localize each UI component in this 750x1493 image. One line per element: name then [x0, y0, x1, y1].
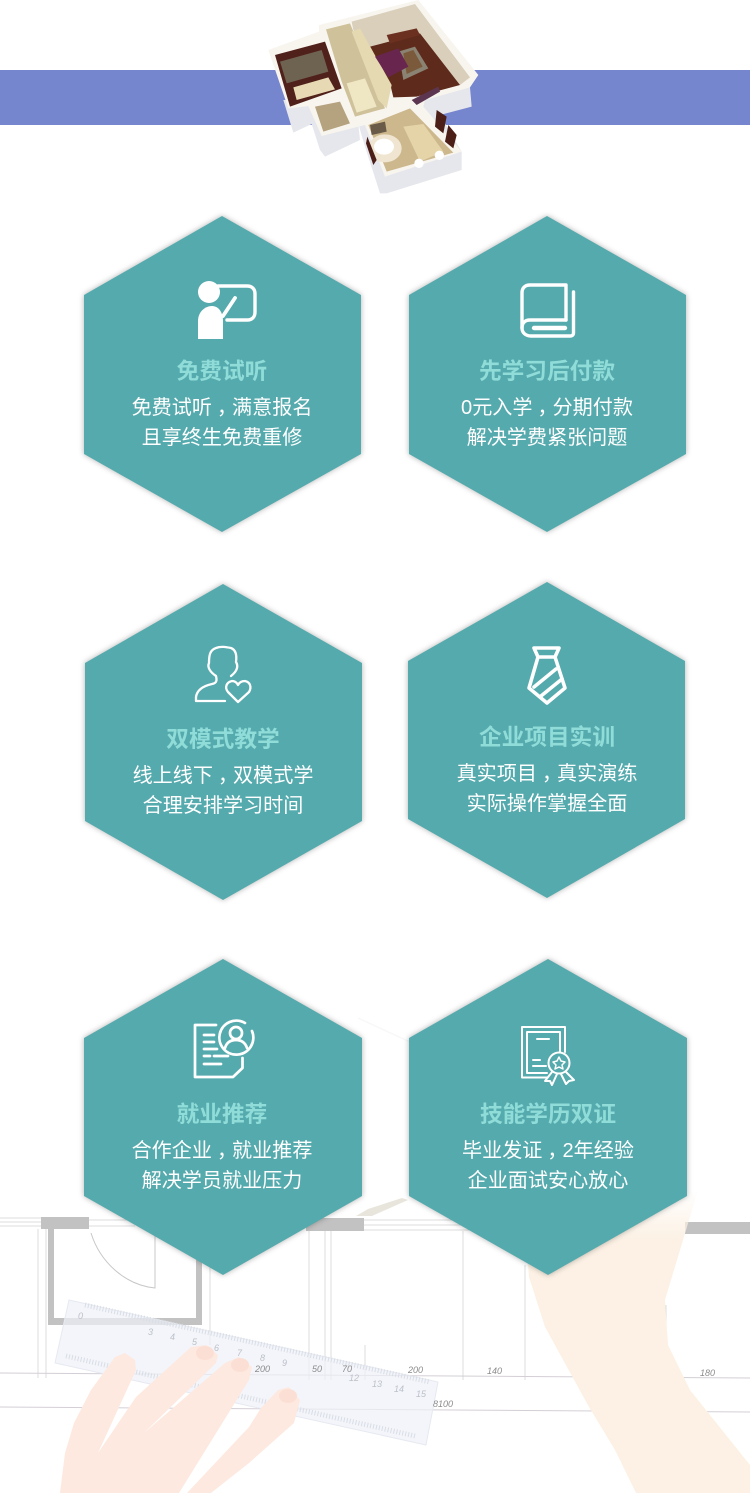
house floor plan image [268, 0, 478, 194]
ruler: 5 [192, 1337, 198, 1347]
icon: presenter [198, 281, 255, 339]
dimension labels: 8100 [433, 1399, 453, 1409]
dimension labels: 180 [700, 1368, 715, 1378]
hexagon [85, 584, 362, 900]
dimension labels: 140 [487, 1366, 502, 1376]
icon: book [522, 285, 574, 336]
top band [0, 70, 750, 125]
ruler: 4 [170, 1332, 175, 1342]
panel: 就业推荐 [80, 956, 366, 1278]
pencil [356, 1198, 408, 1216]
panel: 先学习后付款 [406, 214, 690, 534]
heading: 双模式教学 [166, 726, 280, 752]
panel: 双模式教学 [82, 582, 366, 902]
ruler: 14 [394, 1384, 404, 1394]
background: blueprint and hands [0, 1198, 750, 1493]
heading: 企业项目实训 [479, 724, 615, 750]
arm [522, 1190, 750, 1493]
panel: 技能学历双证 [406, 956, 690, 1278]
dimension labels: 200 [254, 1364, 270, 1374]
text block: 实际操作掌握全面 [467, 793, 627, 815]
panel: 企业项目实训 [404, 580, 688, 900]
text block: 毕业发证，2年经验 [462, 1140, 634, 1162]
ruler: 7 [237, 1348, 243, 1358]
hexagon [409, 959, 687, 1275]
dimension labels: 70 [342, 1364, 352, 1374]
ruler: 0 [78, 1311, 83, 1321]
heading: 就业推荐 [177, 1101, 267, 1127]
icon: certificate [522, 1027, 574, 1085]
ruler: 9 [282, 1358, 287, 1368]
heading: 免费试听 [177, 358, 267, 384]
icon: resume [195, 1021, 253, 1077]
text block: 且享终生免费重修 [142, 427, 302, 449]
text block: 解决学费紧张问题 [467, 427, 627, 449]
dimension labels: 200 [407, 1365, 423, 1375]
heading: 先学习后付款 [479, 358, 615, 384]
text block: 免费试听，满意报名 [132, 397, 312, 419]
dimension labels [254, 1364, 715, 1409]
text block: 合理安排学习时间 [143, 795, 303, 817]
hexagon [84, 959, 362, 1275]
heading: 技能学历双证 [480, 1101, 616, 1127]
hexagon [409, 216, 686, 532]
text block: 真实项目，真实演练 [457, 763, 637, 785]
hexagon [408, 582, 685, 898]
text block: 线上线下，双模式学 [133, 765, 313, 787]
ruler: 6 [214, 1343, 219, 1353]
text block: 0元入学，分期付款 [461, 397, 633, 419]
ruler: 15 [416, 1389, 427, 1399]
text block: 企业面试安心放心 [468, 1170, 628, 1192]
ruler: 3 [148, 1327, 153, 1337]
ruler: 12 [349, 1373, 359, 1383]
dimension labels: 50 [312, 1364, 322, 1374]
text block: 解决学员就业压力 [142, 1170, 302, 1192]
ruler: 13 [372, 1379, 382, 1389]
text block: 合作企业，就业推荐 [132, 1140, 312, 1162]
hand [60, 1345, 300, 1493]
icon: necktie [529, 648, 565, 703]
hexagon [84, 216, 361, 532]
ruler [55, 1300, 438, 1445]
icon: person with heart [196, 647, 250, 702]
ruler: 8 [260, 1353, 265, 1363]
panel: 免费试听 [80, 214, 364, 534]
